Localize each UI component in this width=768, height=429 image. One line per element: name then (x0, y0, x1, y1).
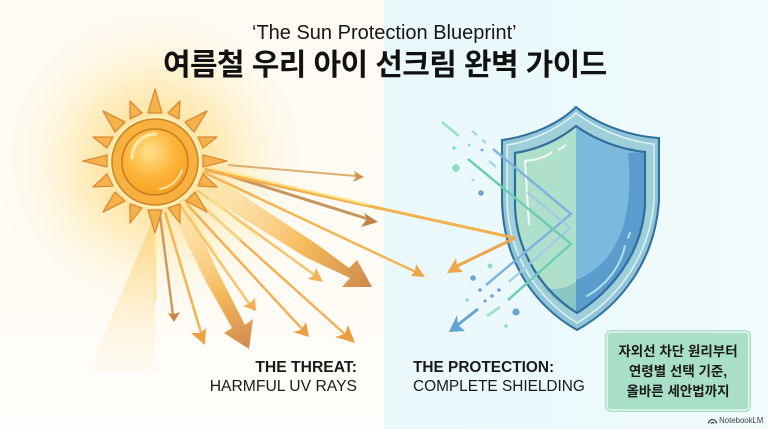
ray 7 (183, 200, 303, 330)
ray to shield (205, 170, 515, 238)
shield inner left (515, 126, 576, 313)
label: the protection: COMPLETE SHIELDING (413, 378, 585, 395)
callout: 자외선 차단 원리부터 (618, 344, 738, 359)
deflected blue ray (486, 149, 571, 285)
wide ray down (172, 205, 253, 349)
subtitle: ‘The Sun Protection Blueprint’ (252, 22, 517, 44)
notebooklm logo: NotebookLM (719, 416, 763, 425)
ray 10 (165, 212, 202, 336)
thin ray 1 (228, 165, 356, 176)
ray 3 (203, 172, 418, 273)
shield highlights (525, 145, 566, 225)
title: 여름철 우리 아이 선크림 완벽 가이드 (163, 49, 607, 82)
deflected green ray (468, 159, 571, 300)
label: the threat (210, 359, 357, 395)
reflected ray (455, 238, 515, 267)
light beam (88, 215, 155, 372)
ray 11 (160, 215, 173, 315)
label: the protection (413, 359, 585, 395)
label: the threat: HARMFUL UV RAYS (210, 378, 357, 395)
small dashes and dots (442, 122, 508, 328)
callout: 올바른 세안법까지 (626, 384, 730, 399)
sun disc (109, 116, 201, 208)
ray 8 (180, 205, 250, 305)
thin ray 2 (205, 168, 368, 219)
shield outer rim (502, 107, 659, 330)
ray 6 (190, 195, 347, 336)
callout: 연령별 선택 기준, (629, 364, 727, 379)
blue escaping arrow (455, 309, 478, 327)
yellow highlights (154, 235, 156, 300)
label: the protection: THE PROTECTION: (413, 359, 554, 376)
label: the threat: THE THREAT: (255, 359, 357, 376)
wide ray right (200, 175, 372, 287)
sun spikes (83, 89, 227, 233)
shield inner right (576, 126, 645, 313)
callout (605, 330, 751, 412)
ray 5 (197, 190, 316, 276)
